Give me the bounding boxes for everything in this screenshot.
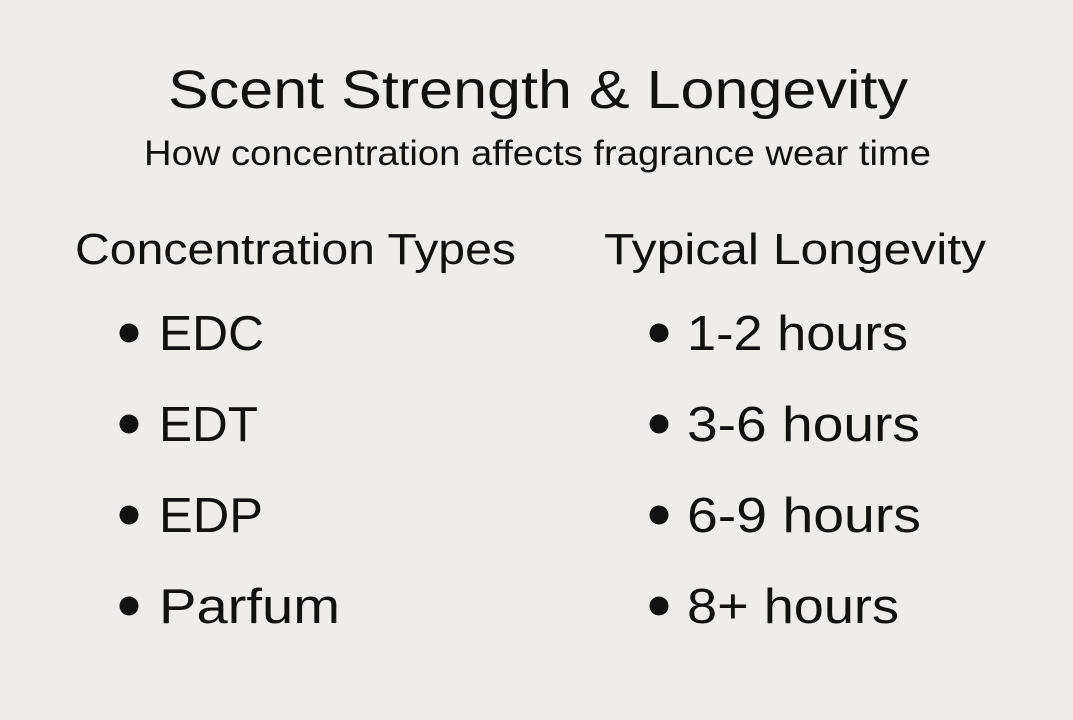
list item: EDP: EDP — [159, 489, 263, 543]
list item: 8+ hours: 8+ hours — [687, 580, 899, 634]
heading: typical longevity: Typical Longevity — [604, 225, 986, 274]
heading: concentration types: Concentration Types — [75, 225, 516, 274]
list item: EDC: EDC — [159, 307, 264, 361]
subtitle: How concentration affects fragrance wear time — [144, 134, 931, 173]
list item: EDT: EDT — [159, 398, 258, 452]
list item: Parfum: Parfum — [159, 580, 340, 634]
list item: 1-2 hours: 1-2 hours — [687, 307, 908, 361]
list item: 3-6 hours: 3-6 hours — [687, 398, 920, 452]
title: Scent Strength & Longevity — [168, 60, 908, 120]
list item: 6-9 hours: 6-9 hours — [687, 489, 921, 543]
panel: concentration types — [75, 225, 516, 634]
panel: typical longevity — [604, 225, 986, 634]
